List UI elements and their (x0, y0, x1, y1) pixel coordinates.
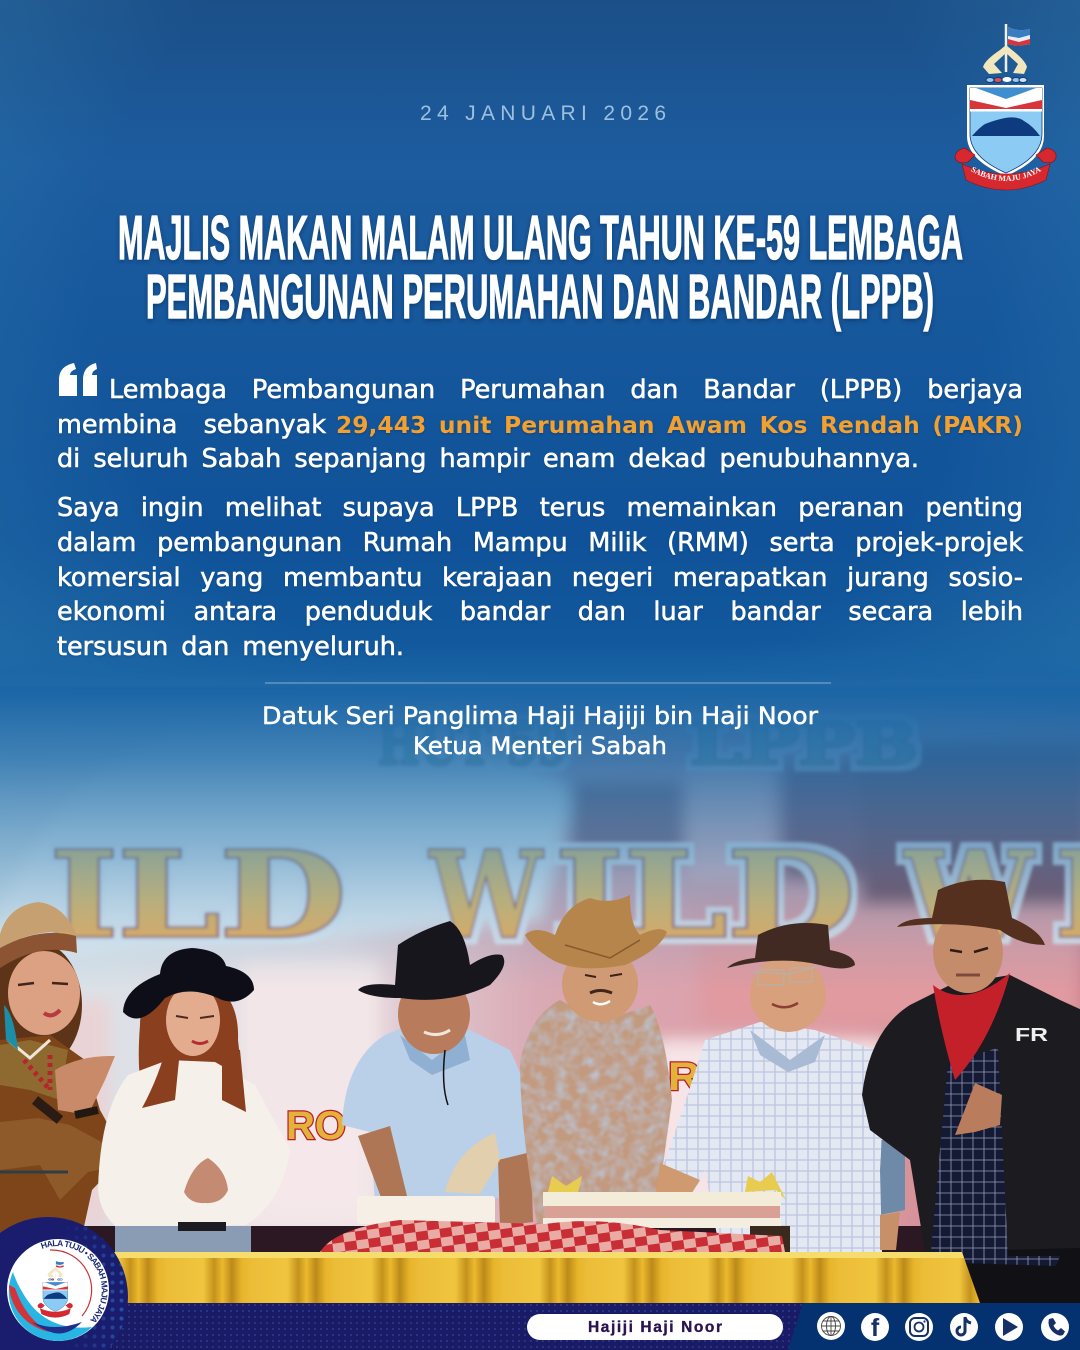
icon: small state crest in badge (38, 1260, 73, 1317)
photo: lower screen lettering (286, 1055, 700, 1148)
photo: screen lettering: W (428, 825, 543, 964)
quote paragraph two: ekonomi antara penduduk bandar dan luar bandar secara lebih (57, 597, 1023, 627)
icon: facebook: f (871, 1314, 880, 1342)
circular Hala Tuju logo badge (0, 1217, 128, 1348)
quote paragraph one: 29,443 unit Perumahan Awam Kos Rendah (PAKR) (336, 411, 1023, 439)
person: woman in feather headdress (0, 902, 125, 1245)
quote paragraph two: Saya ingin melihat supaya LPPB terus memainkan peranan penting (57, 493, 1023, 523)
quote paragraph two: dalam pembangunan Rumah Mampu Milik (RMM) serta projek-projek (57, 528, 1023, 558)
person: man in black jacket, red bandana and leather hat: FR (1015, 1025, 1048, 1045)
icon: opening quotation mark (59, 363, 97, 396)
photo: blurred LED stage screen (0, 690, 1080, 1260)
quote paragraph one: membina sebanyak (57, 410, 326, 440)
photo: screen heading fragment: HUT 59 (378, 710, 568, 778)
photo: screen lettering: W (903, 825, 1034, 964)
blue fade over top of photo (0, 640, 1080, 990)
photo: screen lettering (50, 825, 1080, 964)
table with gold skirt (100, 1252, 980, 1303)
person: man in blue shirt and black hat (342, 921, 538, 1226)
divider (265, 682, 831, 684)
state crest: SABAH MAJU JAYA (971, 167, 1042, 182)
quote paragraph one: di seluruh Sabah sepanjang hampir enam dekad penubuhannya. (57, 444, 919, 474)
quote paragraph two (57, 493, 1024, 662)
name pill (527, 1314, 783, 1340)
footer bar (0, 1303, 1080, 1350)
title (118, 204, 963, 332)
photo: screen lettering: ILD (555, 825, 855, 964)
icon: youtube play (995, 1313, 1023, 1341)
dark stage floor (80, 1226, 980, 1266)
date: 24 JANUARI 2026 (420, 102, 666, 125)
circular Hala Tuju logo badge: HALA TUJU • SABAH MAJU JAYA (40, 1240, 108, 1322)
person: man in checked shirt and brown hat (655, 923, 905, 1252)
icon: website globe (817, 1312, 845, 1340)
quote paragraph two: komersial yang membantu kerajaan negeri merapatkan jurang sosio- (57, 563, 1023, 593)
quote paragraph one: Lembaga Pembangunan Perumahan dan Bandar (LPPB) berjaya (109, 375, 1023, 405)
birthday cakes and red checked cloth (320, 1133, 790, 1252)
photo: lower screen lettering: R (668, 1055, 700, 1099)
quote paragraph one (57, 375, 1023, 474)
attribution: Datuk Seri Panglima Haji Hajiji bin Haji Noor (262, 702, 818, 730)
person: woman in white blouse and black hat (98, 948, 290, 1254)
name pill: Hajiji Haji Noor (588, 1319, 722, 1336)
photo: screen heading fragment: LPPB (690, 710, 918, 778)
quote paragraph two: tersusun dan menyeluruh. (57, 632, 404, 662)
attribution (262, 702, 818, 760)
photo: lower screen lettering: RO (286, 1104, 346, 1148)
icon: instagram (905, 1313, 933, 1341)
icon: tiktok (950, 1313, 978, 1341)
state crest (954, 24, 1056, 190)
icon: facebook (861, 1313, 889, 1342)
photo: screen lettering: ILD (50, 825, 346, 964)
icon: phone (1041, 1313, 1069, 1341)
person: man in batik shirt and tan hat (520, 895, 672, 1240)
person: man in black jacket, red bandana and leather hat (862, 880, 1080, 1306)
attribution: Ketua Menteri Sabah (413, 732, 667, 760)
photo: screen heading fragment (378, 710, 918, 778)
